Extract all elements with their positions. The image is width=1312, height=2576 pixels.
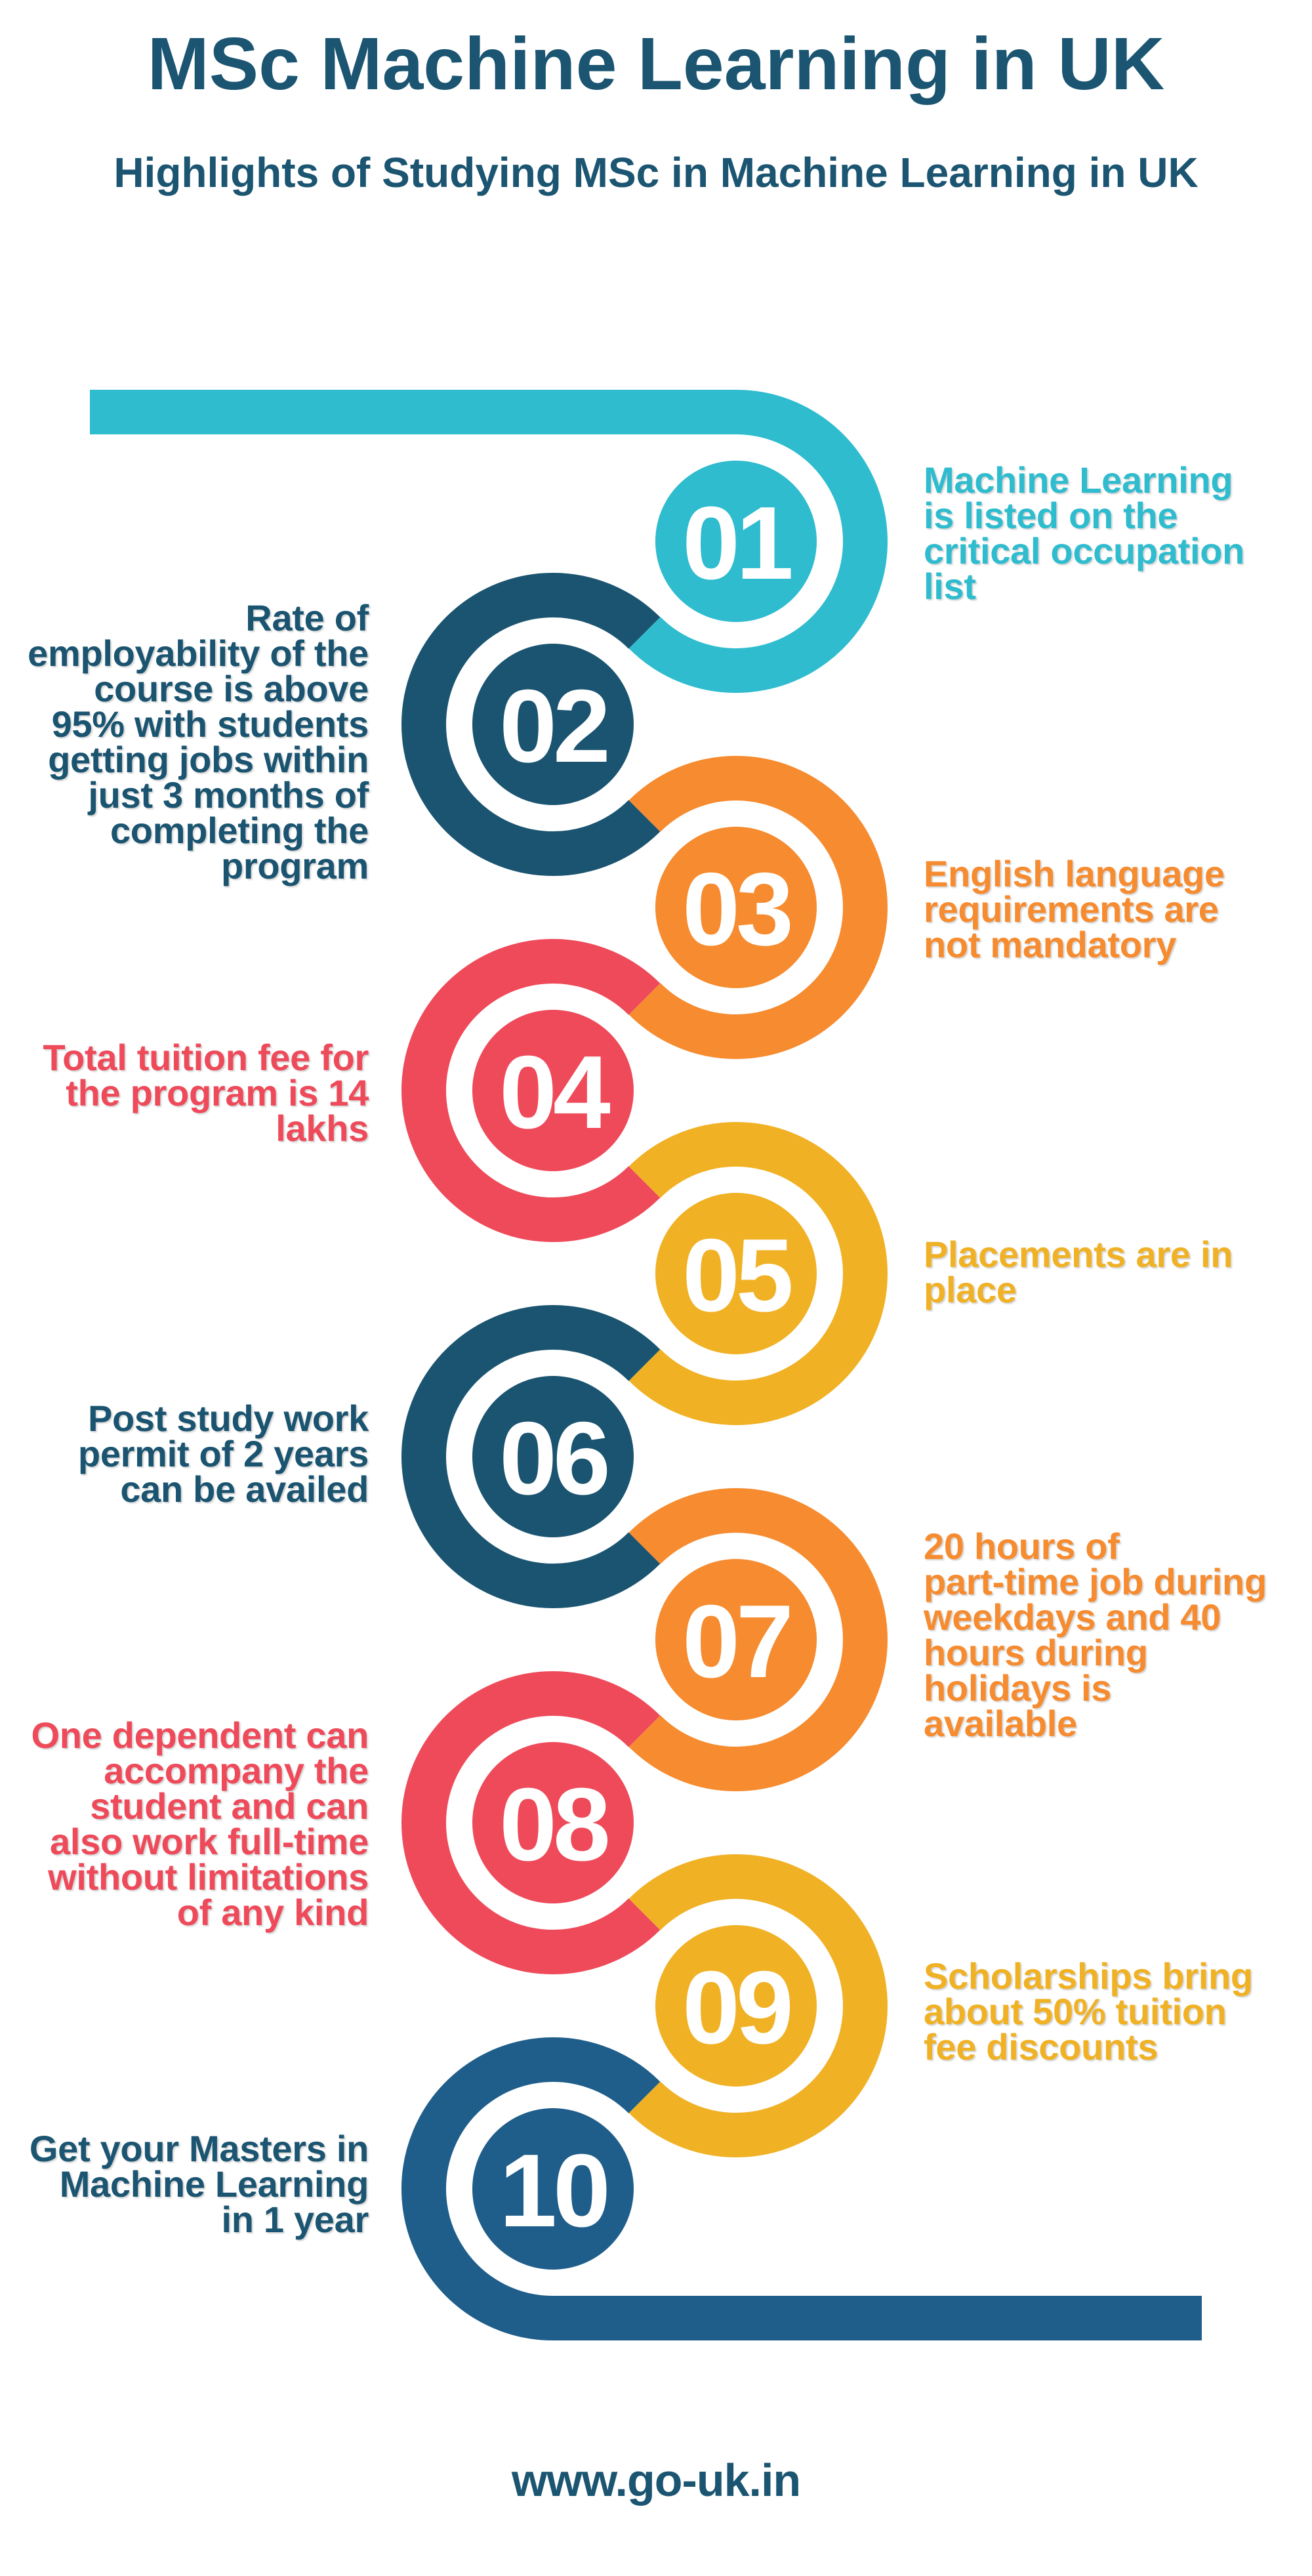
text 07: holidays is	[924, 1667, 1111, 1709]
ring 08	[424, 1693, 644, 1952]
badge 04: 04	[499, 1035, 611, 1150]
text 05: Placements are in	[924, 1234, 1233, 1275]
text 08: student and can	[90, 1785, 369, 1827]
badge 04	[472, 1010, 634, 1171]
text 07: hours during	[924, 1632, 1148, 1673]
text 08: of any kind	[177, 1892, 369, 1933]
footer url: www.go-uk.in	[512, 2455, 800, 2506]
text 02: program	[221, 845, 369, 886]
text 09: Scholarships bring	[924, 1955, 1253, 1997]
text 01: Machine Learning	[924, 459, 1233, 501]
badge 03	[655, 827, 817, 988]
text 04: lakhs	[276, 1108, 369, 1149]
text 02: course is above	[94, 668, 369, 709]
badge 06	[472, 1376, 634, 1537]
badge 01	[655, 461, 817, 622]
subtitle: Highlights of Studying MSc in Machine Learning in UK	[113, 149, 1199, 196]
badge 05: 05	[682, 1218, 791, 1333]
text 02: getting jobs within	[48, 739, 369, 780]
text 10: Get your Masters in	[30, 2128, 369, 2169]
badge 02: 02	[499, 669, 607, 784]
text 01: critical occupation	[924, 530, 1244, 571]
title: MSc Machine Learning in UK	[148, 22, 1164, 105]
ring 03	[645, 778, 865, 1037]
text 01	[924, 459, 1244, 607]
badge 06: 06	[499, 1401, 607, 1516]
text 06: Post study work	[88, 1398, 369, 1439]
badge 07: 07	[682, 1584, 790, 1699]
text 02: Rate of	[245, 597, 369, 638]
text 06	[78, 1398, 370, 1510]
text 09: fee discounts	[924, 2026, 1158, 2067]
badge 02	[472, 644, 634, 805]
badge 03: 03	[682, 852, 790, 967]
text 06: permit of 2 years	[78, 1433, 369, 1474]
badge 08	[472, 1742, 634, 1903]
text 04	[43, 1037, 371, 1149]
text 07: 20 hours of	[924, 1526, 1120, 1567]
text 02	[28, 597, 371, 888]
text 09	[924, 1955, 1253, 2067]
text 07: available	[924, 1703, 1077, 1744]
text 02: completing the	[110, 810, 369, 851]
text 10	[30, 2128, 370, 2241]
text 05: place	[924, 1269, 1017, 1310]
text 02: employability of the	[28, 633, 369, 674]
badge 07	[655, 1559, 817, 1720]
text 03: not mandatory	[924, 924, 1176, 965]
text 03: requirements are	[924, 888, 1219, 930]
badge 05	[655, 1193, 817, 1354]
text 09: about 50% tuition	[924, 1991, 1227, 2032]
text 02: 95% with students	[52, 703, 369, 745]
ring 01	[90, 412, 865, 671]
badge 01: 01	[682, 486, 791, 601]
text 01: list	[924, 566, 976, 607]
text 08: without limitations	[48, 1856, 369, 1898]
badge 09: 09	[682, 1950, 790, 2066]
text 07	[924, 1526, 1267, 1744]
badge 10	[472, 2108, 634, 2270]
badge 09	[655, 1925, 817, 2087]
ring 10	[424, 2060, 1202, 2318]
text 03: English language	[924, 853, 1225, 894]
badge 08: 08	[499, 1767, 608, 1882]
ring 02	[424, 595, 644, 854]
text 02: just 3 months of	[88, 774, 369, 816]
text 01: is listed on the	[924, 495, 1178, 536]
text 10: in 1 year	[221, 2199, 369, 2240]
text 03	[924, 853, 1225, 967]
ring 09	[645, 1877, 865, 2135]
ring 05	[645, 1144, 865, 1403]
badge 10: 10	[499, 2133, 607, 2249]
ring 06	[424, 1327, 644, 1586]
text 07: weekdays and 40	[924, 1596, 1221, 1638]
text 04: the program is 14	[66, 1072, 369, 1113]
text 08: also work full-time	[50, 1821, 369, 1862]
text 08	[31, 1714, 369, 1934]
ring 07	[645, 1510, 865, 1769]
text 07: part-time job during	[924, 1561, 1267, 1602]
text 08: One dependent can	[31, 1714, 369, 1756]
text 08: accompany the	[104, 1750, 369, 1791]
text 06: can be availed	[120, 1468, 369, 1510]
ring 04	[424, 961, 644, 1220]
text 10: Machine Learning	[60, 2163, 369, 2205]
text 05	[924, 1234, 1233, 1312]
text 04: Total tuition fee for	[43, 1037, 369, 1078]
